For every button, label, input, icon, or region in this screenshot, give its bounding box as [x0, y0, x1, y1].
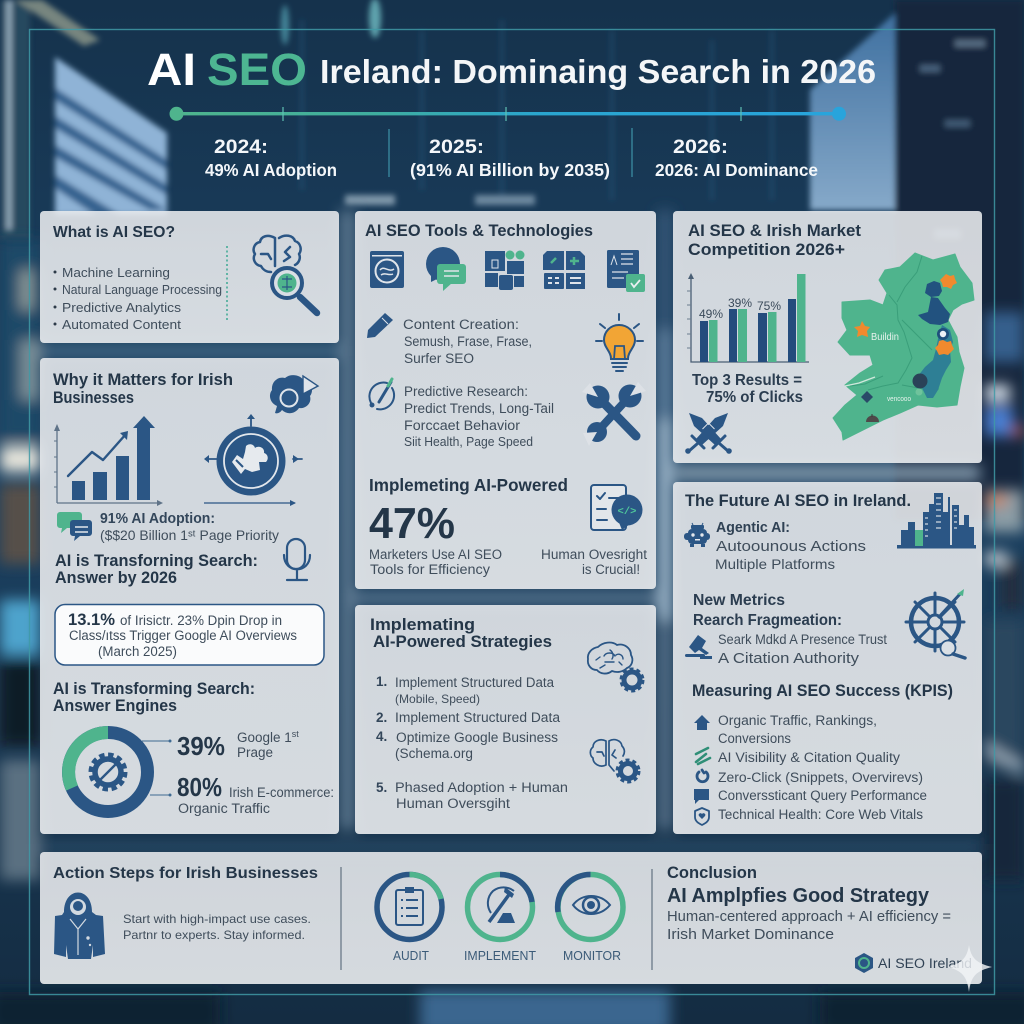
bullet list — [54, 265, 222, 332]
heading: new metrics: New Metrics — [693, 592, 785, 609]
text: content creation: Semush, Frase, Frase, — [404, 334, 532, 349]
heading: why it matters: Why it Matters for Irish — [53, 371, 233, 389]
panel: action steps and conclusion — [40, 852, 982, 984]
stat: 39% — [177, 729, 299, 761]
map: ireland: Buildin — [871, 332, 899, 343]
panel: future of AI SEO — [673, 482, 982, 834]
stat: 80%: 80% — [177, 772, 222, 802]
text: start with — [123, 912, 311, 942]
icon: light bulb — [596, 314, 643, 371]
heading: market: Competition 2026+ — [688, 240, 845, 259]
stat: AI adoption: ($$20 Billion 1ˢᵗ Page Priority — [100, 527, 279, 543]
text: predictive research — [404, 384, 554, 449]
heading: market: AI SEO & Irish Market — [688, 221, 861, 240]
map: ireland — [833, 253, 974, 440]
milestone 2026: 2026: — [673, 136, 728, 158]
milestone 2026: 2026: AI Dominance — [655, 160, 818, 180]
milestone 2025 — [410, 136, 610, 180]
bullet list: Automated Content — [62, 317, 181, 332]
list: KPIs: Zero-Click (Snippets, Overvirevs) — [718, 770, 923, 785]
numbered list: Implement Structured Data — [395, 710, 560, 725]
text: agentic AI: Agentic AI: — [716, 520, 790, 536]
milestone 2024: 49% AI Adoption — [205, 160, 337, 180]
icon: predictive circle — [369, 379, 394, 409]
step: monitor: MONITOR — [563, 949, 621, 963]
stat: 39%: Google 1 — [237, 730, 292, 745]
heading: answer engines: AI is Transforming Search: — [53, 680, 255, 698]
text: agentic AI: Autoounous Actions — [716, 538, 866, 555]
list: KPIs: AI Visibility & Citation Quality — [718, 750, 900, 765]
icon: robot — [684, 523, 710, 547]
callout: AI overviews — [55, 604, 324, 665]
text: conclusion: Irish Market Dominance — [667, 927, 834, 943]
bullet list: Natural Language Processing — [62, 282, 222, 297]
text: marketers: Marketers Use AI SEO — [369, 547, 502, 562]
icon: gear — [90, 754, 126, 790]
stat: 39%: Prage — [237, 745, 273, 760]
text: predictive research: Predict Trends, Long-Tail — [404, 401, 554, 416]
step: monitor — [558, 874, 623, 963]
icon: ring — [697, 770, 708, 782]
icon: brain and gear — [590, 740, 639, 782]
list: KPIs — [718, 713, 927, 822]
panel: why it matters — [40, 358, 339, 834]
heading: future: The Future AI SEO in Ireland. — [685, 492, 911, 510]
milestone 2024 — [205, 136, 337, 180]
panel: what is AI SEO — [40, 211, 339, 343]
milestone 2024: 2024: — [214, 136, 268, 158]
list: KPIs: Converssticant Query Performance — [718, 788, 927, 803]
title: Ireland: Dominaing Search in 2026 — [320, 54, 876, 91]
icon: cloud and gear — [588, 643, 643, 691]
numbered list: 5. — [376, 780, 387, 795]
numbered list: Implement Structured Data — [395, 675, 554, 690]
bar chart: market: 49% — [699, 307, 723, 321]
heading: strategies: AI-Powered Strategies — [373, 633, 552, 651]
numbered list: 2. — [376, 710, 387, 725]
text: marketers: Tools for Efficiency — [370, 562, 490, 577]
text: predictive research: Predictive Research: — [404, 384, 528, 399]
heading: new metrics: Rearch Fragmeation: — [693, 612, 842, 629]
numbered list: Optimize Google Business — [396, 730, 558, 745]
title — [147, 44, 876, 95]
heading: implementing AI-powered: Implemeting AI-Powered — [369, 475, 568, 495]
text: human oversight — [541, 547, 647, 577]
heading: strategies: Implemating — [370, 616, 475, 634]
heading: why it matters: Businesses — [53, 389, 134, 407]
text: content creation: Content Creation: — [403, 317, 519, 332]
text: search trust: A Citation Authority — [718, 650, 860, 667]
icon: target wheel — [906, 589, 966, 658]
bar chart: market — [687, 273, 809, 362]
text: search trust — [718, 631, 887, 667]
icon: microphone — [284, 539, 310, 580]
title: SEO — [207, 44, 307, 95]
step: implement: IMPLEMENT — [464, 949, 536, 963]
icon: house — [694, 715, 710, 730]
icon: sparkle watermark — [948, 945, 992, 992]
bar chart: market: 39% — [728, 296, 752, 310]
stat: AI adoption — [100, 510, 279, 543]
text: search trust: Seark Mdkd A Presence Trust — [718, 631, 887, 647]
stat: 39%: 39% — [177, 731, 225, 761]
stat: AI adoption: 91% AI Adoption: — [100, 510, 215, 527]
icon row: tools — [370, 247, 645, 292]
text: predictive research: Forccaet Behavior — [404, 418, 521, 433]
numbered list: (Schema.org — [395, 746, 473, 761]
stat: 80% — [177, 772, 334, 816]
donut chart — [68, 732, 172, 812]
icon: puzzle compass — [204, 414, 302, 506]
icon: brain and magnifier — [254, 236, 317, 313]
text: human oversight: Human Ovesright — [541, 547, 647, 562]
bar chart: market: 75% — [757, 299, 781, 313]
title: AI — [147, 44, 196, 95]
callout: AI overviews: (March 2025) — [98, 644, 177, 659]
text: conclusion: Human-centered approach + AI efficiency = — [667, 909, 951, 925]
milestone 2026 — [655, 136, 818, 180]
numbered list: 4. — [376, 729, 387, 744]
icon: cloud target — [270, 375, 318, 413]
step: audit — [377, 874, 442, 963]
callout: AI overviews: of Irisictr. 23% Dpin Drop in — [120, 613, 282, 628]
milestone 2025: (91% AI Billion by 2035) — [410, 160, 610, 180]
heading: answer engines: Answer Engines — [53, 697, 177, 715]
stat: 39%: st — [292, 729, 299, 739]
bar chart: growth — [54, 416, 163, 506]
icon: code checklist — [591, 485, 642, 530]
icon: zigzag — [696, 748, 710, 764]
icon: city skyline — [897, 493, 976, 548]
stat: top 3 results: Top 3 Results = — [692, 372, 802, 389]
text: human oversight: is Crucial! — [582, 562, 640, 577]
heading: what is AI SEO: What is AI SEO? — [53, 224, 175, 241]
heading: KPIs: Measuring AI SEO Success (KPIS) — [692, 682, 953, 700]
text: start with: Partnr to experts. Stay informed. — [123, 928, 305, 942]
icon: crossed wrenches — [582, 382, 646, 446]
panel: irish market — [673, 211, 982, 463]
timeline — [170, 107, 846, 180]
callout: AI overviews: 13.1% — [68, 610, 115, 629]
heading: action steps: Action Steps for Irish Businesses — [53, 865, 318, 882]
numbered list — [376, 674, 568, 811]
stat: top 3 results: 75% of Clicks — [706, 389, 803, 406]
text: content creation — [403, 317, 532, 366]
icon: chat bubbles — [57, 512, 92, 541]
text: conclusion — [667, 864, 951, 943]
text: agentic AI — [715, 520, 866, 572]
icon: shield — [695, 808, 709, 825]
callout: AI overviews: Class/ıtss Trigger Google AI Overviews — [69, 628, 297, 643]
icon: gavel — [685, 635, 712, 659]
milestone 2025: 2025: — [429, 136, 484, 158]
text: agentic AI: Multiple Platforms — [715, 556, 835, 572]
panel: AI SEO tools — [355, 211, 656, 589]
text: marketers — [369, 547, 502, 577]
text: conclusion: Conclusion — [667, 864, 757, 882]
list: KPIs: Organic Traffic, Rankings, — [718, 713, 877, 728]
list: KPIs: Conversions — [718, 731, 791, 746]
icon: code checklist: </> — [618, 506, 636, 518]
numbered list: (Mobile, Speed) — [395, 692, 480, 706]
numbered list: 1. — [376, 674, 387, 689]
numbered list: Phased Adoption + Human — [395, 780, 568, 795]
bullet list: Machine Learning — [62, 265, 170, 280]
stat: 47%: 47% — [369, 499, 455, 548]
text: content creation: Surfer SEO — [404, 351, 474, 366]
text: start with: Start with high-impact use cases. — [123, 912, 311, 926]
heading: answer by 2026: AI is Transforning Search: — [55, 552, 258, 570]
list: KPIs: Technical Health: Core Web Vitals — [718, 807, 923, 822]
step: implement — [464, 874, 536, 963]
map: ireland: vencooo — [887, 396, 911, 403]
numbered list: Human Oversgiht — [396, 796, 510, 811]
text: predictive research: Siit Health, Page Speed — [404, 435, 533, 449]
panel: implementing strategies — [355, 605, 656, 834]
icon: chat — [694, 789, 709, 804]
text: conclusion: AI Amplpfies Good Strategy — [667, 885, 930, 907]
logo: AI SEO Ireland — [855, 953, 972, 973]
heading: tools: AI SEO Tools & Technologies — [365, 221, 593, 240]
icon: pencil — [367, 313, 393, 338]
icon: crossed swords — [685, 413, 732, 454]
stat: 80%: Irish E-commerce: — [229, 785, 334, 800]
step: audit: AUDIT — [393, 949, 429, 963]
stat: 80%: Organic Traffic — [178, 801, 270, 816]
bullet list: Predictive Analytics — [62, 300, 182, 315]
heading: answer by 2026: Answer by 2026 — [55, 569, 177, 587]
logo: AI SEO Ireland: AI SEO Ireland — [878, 956, 972, 971]
icon: business person — [54, 892, 105, 959]
